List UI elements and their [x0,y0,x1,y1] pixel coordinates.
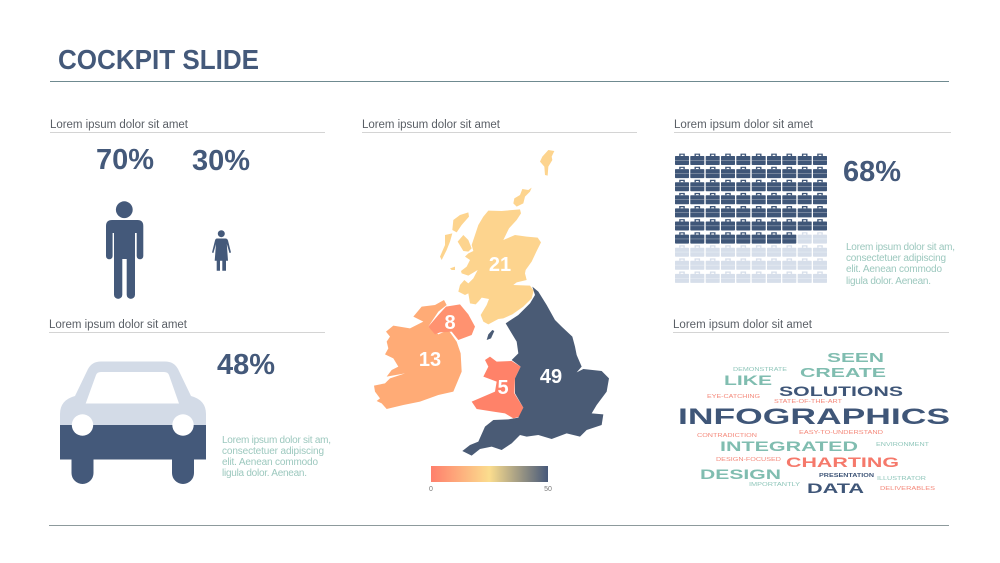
map value labels: 5 [497,377,509,399]
stat: 68 percent: 68% [843,156,901,188]
text block: pictogram description: consectetuer adipiscing [846,253,946,264]
word cloud: CHARTING [786,454,899,470]
word cloud: CREATE [800,365,887,380]
map value labels: 49 [540,366,562,388]
map value labels [419,254,562,399]
word cloud: EYE-CATCHING [707,394,760,400]
map [374,150,609,456]
panel: gender split [50,119,325,299]
word cloud: DELIVERABLES [880,486,935,492]
word cloud: DESIGN [700,466,781,482]
text block: pictogram description: elit. Aenean commodo [846,264,942,275]
word cloud: DATA [807,480,864,496]
panel: word cloud [673,319,950,496]
heading: word cloud: Lorem ipsum dolor sit amet [673,319,813,331]
text block: car description: elit. Aenean commodo [222,457,318,468]
panel: briefcase pictogram [674,119,955,287]
word cloud: EASY-TO-UNDERSTAND [799,430,883,436]
text block: pictogram description: ligula dolor. Aenean. [846,276,931,287]
text block: car description: consectetuer adipiscing [222,446,324,457]
region: Northern Ireland [428,304,475,340]
colour scale legend [429,466,552,493]
icon: car [60,362,206,484]
word cloud: CONTRADICTION [697,433,757,439]
word cloud: STATE-OF-THE-ART [774,399,843,405]
text block: pictogram description: Lorem ipsum dolor sit am, [846,242,955,253]
word cloud [678,350,950,496]
region: Ireland [374,300,462,409]
word cloud: SOLUTIONS [779,383,903,399]
word cloud: INTEGRATED [720,438,858,454]
word cloud: PRESENTATION [819,473,874,479]
text block: car description: Lorem ipsum dolor sit am, [222,435,331,446]
word cloud: DEMONSTRATE [733,367,787,373]
heading: pictogram: Lorem ipsum dolor sit amet [674,119,814,131]
title: COCKPIT SLIDE [58,44,259,75]
word cloud: INFOGRAPHICS [678,404,950,429]
pictogram: 68 of 100 briefcases [675,154,827,283]
region: Wales [472,357,523,418]
heading: car statistic: Lorem ipsum dolor sit amet [49,319,188,331]
map value labels: 8 [444,312,456,334]
stat: 70 percent: 70% [96,144,154,176]
map value labels: 13 [419,349,441,371]
icon: woman [212,230,231,271]
icon: man [106,201,143,299]
colour scale legend: 0 [429,486,433,493]
text block: car description [222,435,331,479]
region: Scotland [440,150,554,324]
word cloud: ILLUSTRATOR [877,476,926,482]
region: England [462,287,609,456]
panel: car statistic [49,319,331,484]
stat: 48 percent: 48% [217,349,275,381]
text block: car description: ligula dolor. Aenean. [222,468,307,479]
heading: map: Lorem ipsum dolor sit amet [362,119,501,131]
colour scale legend: 50 [544,486,552,493]
word cloud: LIKE [724,372,772,388]
text block: pictogram description [846,242,955,287]
word cloud: SEEN [827,350,884,365]
word cloud: ENVIRONMENT [876,442,930,448]
panel: UK and Ireland map [362,119,637,493]
word cloud: DESIGN-FOCUSED [716,457,781,463]
word cloud: IMPORTANTLY [749,482,800,488]
heading: gender split: Lorem ipsum dolor sit amet [50,119,189,131]
stat: 30 percent: 30% [192,145,250,177]
map value labels: 21 [489,254,511,276]
